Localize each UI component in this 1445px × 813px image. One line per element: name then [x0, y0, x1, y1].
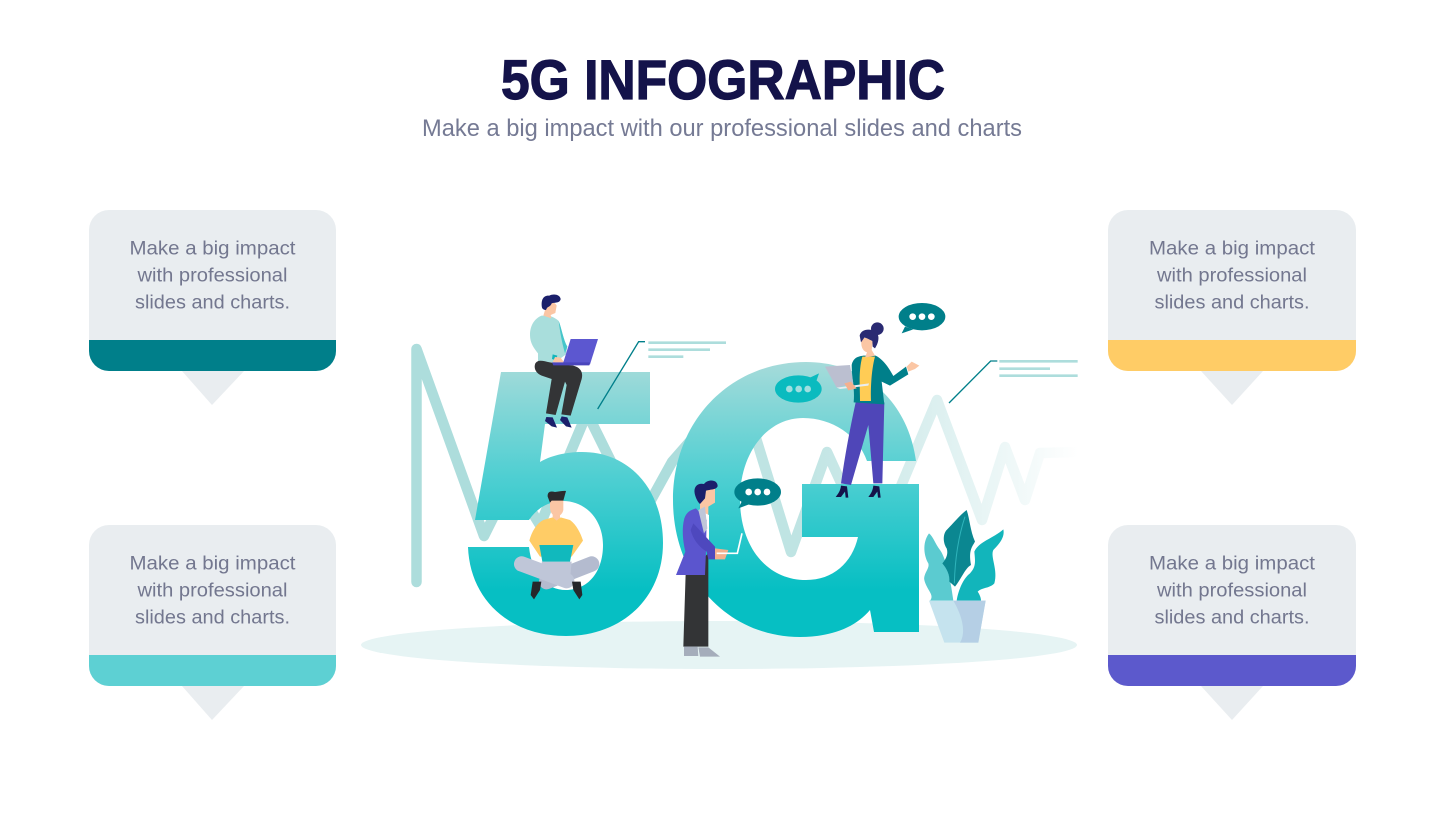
figure: standing woman with tablet — [825, 322, 919, 498]
panel: top right card — [1108, 210, 1356, 405]
panel: bottom right card: Make a big impact — [1149, 554, 1316, 574]
callout: right leader and lines — [949, 361, 1078, 403]
panel: bottom left card: Make a big impact — [130, 554, 296, 574]
speech bubble: on letter G — [775, 373, 822, 403]
panel: bottom left card — [89, 525, 336, 720]
panel: top right card: slides and charts. — [1154, 292, 1310, 314]
panel: bottom left card: slides and charts. — [135, 608, 290, 628]
subtitle: Make a big impact with our professional slides and charts — [422, 115, 1022, 142]
panel: top left card: with professional — [136, 266, 288, 286]
callout: left leader and lines — [598, 342, 726, 409]
title: 5G INFOGRAPHIC — [501, 48, 945, 111]
figure: man sitting on the 5 with laptop — [530, 294, 598, 428]
panel: bottom right card: with professional — [1156, 580, 1307, 602]
signal wave line — [416, 349, 1076, 582]
panel: top left card: Make a big impact — [130, 238, 296, 260]
speech bubble: woman — [899, 303, 945, 333]
panel: top right card: with professional — [1156, 266, 1307, 286]
big digit 5 — [468, 372, 663, 636]
big letter G — [673, 362, 919, 637]
panel: bottom right card: slides and charts. — [1154, 608, 1310, 628]
ground ellipse — [361, 621, 1077, 669]
panel: bottom right card — [1108, 525, 1356, 720]
panel: bottom left card: with professional — [136, 580, 288, 602]
figure: man sitting cross-legged — [522, 491, 592, 599]
figure: standing man with laptop — [676, 480, 742, 657]
panel: top right card: Make a big impact — [1149, 238, 1316, 260]
icon: potted plant — [924, 510, 1004, 643]
speech bubble: standing man — [734, 478, 781, 508]
panel: top left card — [89, 210, 336, 405]
panel: top left card: slides and charts. — [135, 292, 290, 314]
